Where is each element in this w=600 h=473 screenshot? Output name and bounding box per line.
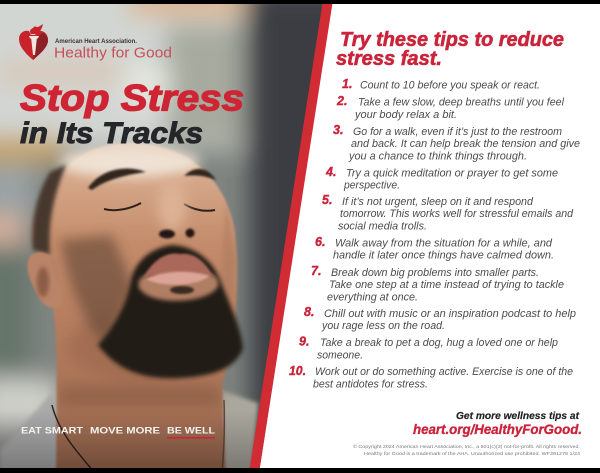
- shirt: [0, 390, 258, 473]
- title: in Its Tracks: [20, 117, 203, 150]
- tip 8: you rage less on the road.: [321, 320, 445, 332]
- red diagonal band: [249, 0, 333, 473]
- stubble: [60, 235, 135, 345]
- tips heading: Try these tips to reduce: [340, 28, 564, 51]
- tip 3: [333, 123, 580, 162]
- copyright: [353, 443, 581, 456]
- tips heading: stress fast.: [336, 47, 442, 70]
- tip 10: [289, 364, 573, 390]
- tip 3: 3.: [333, 123, 343, 137]
- tip 7: 7.: [311, 264, 321, 278]
- title: [20, 78, 244, 150]
- tip 1: Count to 10 before you speak or react.: [360, 80, 540, 92]
- tip 5: [322, 193, 574, 232]
- tip 5: social media trolls.: [338, 220, 427, 232]
- bottom shade: [0, 410, 335, 473]
- necklace: [52, 400, 224, 473]
- tip 2: 2.: [336, 94, 347, 108]
- eyebrows: [88, 169, 216, 190]
- tip 2: your body relax a bit.: [354, 109, 457, 121]
- tip 7: Take one step at a time instead of trying to tackle: [329, 279, 564, 291]
- tip 10: 10.: [289, 364, 306, 378]
- head and neck: [32, 143, 237, 473]
- tip 4: perspective.: [343, 180, 400, 192]
- tip 7: Break down big problems into smaller parts.: [331, 267, 539, 279]
- tip 6: 6.: [315, 235, 325, 249]
- tip 4: [325, 165, 558, 192]
- photo: man with closed eyes: [0, 0, 350, 473]
- call to action: Get more wellness tips at: [456, 410, 579, 422]
- tip 1: 1.: [342, 77, 352, 91]
- copyright: © Copyright 2024 American Heart Association, Inc., a 501(c)(3) not-for-profit. All rights reserved.: [353, 443, 580, 449]
- program name: Healthy for Good: [54, 44, 172, 62]
- logo: American Heart Association Healthy for Good: [19, 24, 172, 62]
- tip 4: 4.: [325, 165, 336, 179]
- white tips panel: [259, 0, 600, 473]
- call to action: [413, 410, 582, 437]
- tip 7: [311, 264, 564, 304]
- tip 9: [299, 334, 558, 362]
- tips heading: [336, 28, 564, 70]
- tips list: [289, 77, 580, 390]
- tip 5: tomorrow. This works well for stressful emails and: [340, 208, 574, 220]
- tip 3: Go for a walk, even if it’s just to the restroom: [353, 126, 562, 138]
- tip 8: Chill out with music or an inspiration podcast to help: [324, 308, 576, 320]
- tip 9: someone.: [317, 350, 363, 362]
- tip 2: Take a few slow, deep breaths until you feel: [358, 96, 565, 108]
- tip 6: handle it later once things have calmed down.: [333, 250, 554, 262]
- icon: heart and torch: [19, 24, 48, 60]
- tip 3: you a chance to think things through.: [348, 150, 527, 162]
- tip 5: 5.: [322, 193, 332, 207]
- tip 10: Work out or do something active. Exercise is one of the: [315, 366, 573, 378]
- tip 9: 9.: [299, 334, 309, 348]
- blurred street background: [0, 0, 350, 473]
- beard: [98, 245, 243, 378]
- tip 10: best antidotes for stress.: [313, 378, 428, 390]
- title: Stop Stress: [20, 78, 244, 118]
- tip 8: 8.: [304, 305, 314, 319]
- tip 5: If it’s not urgent, sleep on it and respond: [342, 196, 534, 208]
- tip 2: [336, 94, 565, 121]
- tip 9: Take a break to pet a dog, hug a loved one or help: [320, 337, 558, 349]
- tip 4: Try a quick meditation or prayer to get some: [346, 168, 558, 180]
- closed eyes: [104, 203, 215, 211]
- copyright: Healthy for Good is a trademark of the AHA. Unauthorized use prohibited. WF391279 1/24: [364, 451, 581, 456]
- tip 3: and back. It can help break the tension and give: [351, 138, 580, 150]
- nose: [158, 179, 194, 238]
- tip 7: everything at once.: [327, 292, 418, 304]
- tagline: EAT SMART: [21, 426, 83, 436]
- organization name: American Heart Association.: [55, 39, 137, 45]
- lips: [143, 254, 214, 285]
- tip 6: [315, 235, 554, 262]
- tagline: [21, 426, 215, 439]
- tagline: BE WELL: [167, 426, 215, 436]
- tip 6: Walk away from the situation for a while, and: [335, 238, 553, 250]
- ear: [28, 253, 62, 308]
- call to action: heart.org/HealthyForGood.: [413, 421, 582, 437]
- tip 8: [304, 305, 576, 332]
- tagline: MOVE MORE: [90, 426, 160, 436]
